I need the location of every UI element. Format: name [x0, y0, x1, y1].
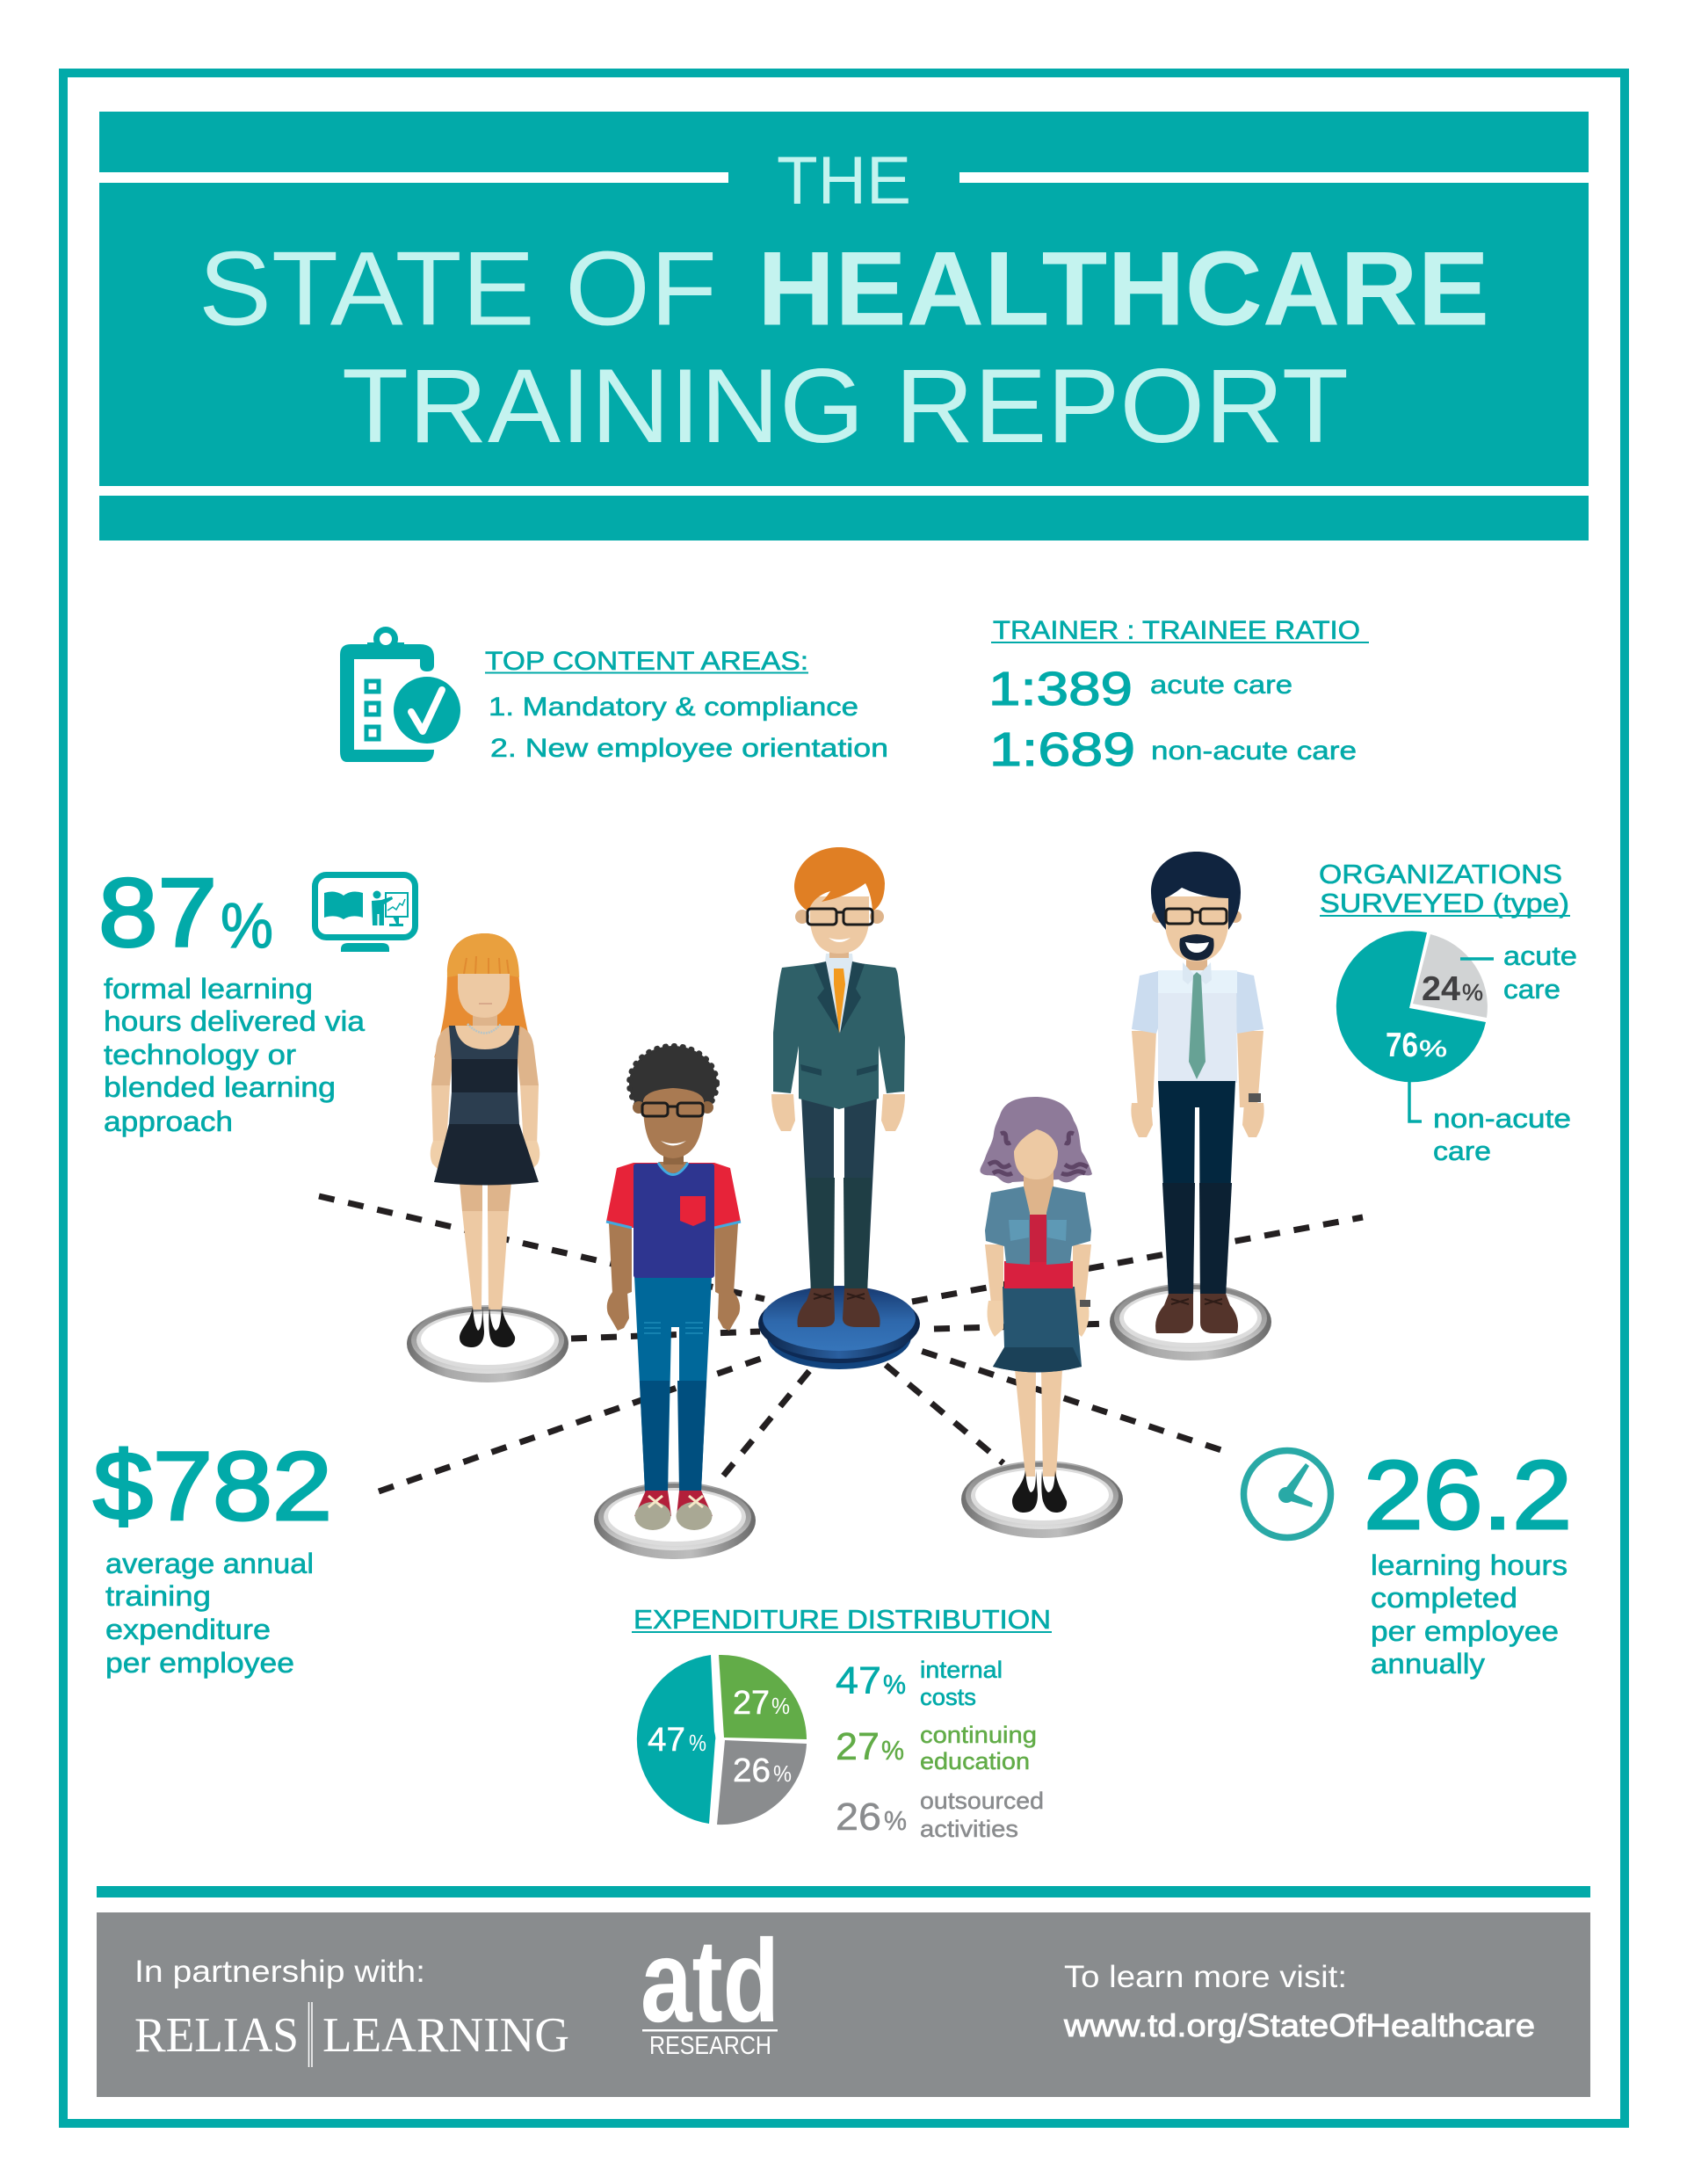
legend: education: [920, 1748, 1030, 1774]
trainer trainee ratio: TRAINER : TRAINEE RATIO: [993, 616, 1360, 645]
footer rule: [97, 1886, 1590, 1897]
stat: 87 percent: 87: [98, 860, 217, 967]
ring platform: woman left: [407, 1305, 568, 1382]
learn more: To learn more visit:: [1064, 1960, 1347, 1994]
pie chart: 26: [733, 1752, 771, 1789]
heading: [1319, 859, 1570, 918]
stat: 26.2 hours: per employee: [1371, 1615, 1559, 1647]
person: woman with orange hair: [431, 933, 539, 1347]
partnership text and Relias logo: RELIAS: [134, 2008, 299, 2063]
person: central man in suit: [771, 847, 905, 1327]
footer panel: [97, 1912, 1590, 2097]
stat: 782 dollars: [93, 1433, 332, 1679]
organizations surveyed pie: %: [1462, 979, 1483, 1005]
header banner: [99, 112, 1589, 541]
ring platform: man left: [594, 1482, 756, 1559]
heading: ORGANIZATIONS: [1319, 859, 1562, 889]
legend: %: [884, 1805, 907, 1836]
title: THE: [777, 142, 911, 218]
stat: 87 percent: %: [221, 891, 273, 961]
stat: 782 dollars: training: [105, 1580, 211, 1612]
stat: 782 dollars: per employee: [105, 1647, 294, 1679]
organizations surveyed pie: non-acute: [1433, 1103, 1571, 1134]
person: man with beard and tie: [1131, 852, 1264, 1333]
organizations surveyed pie: 24: [1422, 970, 1460, 1008]
pie chart: [637, 1655, 807, 1825]
partnership text and Relias logo: [134, 1955, 569, 2067]
trainer trainee ratio: 1:389: [988, 663, 1133, 715]
stat: 782 dollars: average annual: [105, 1548, 314, 1579]
title: HEALTHCARE: [757, 230, 1489, 348]
heading: SURVEYED (type): [1320, 888, 1569, 918]
stat: 87 percent: [98, 860, 365, 1137]
legend: outsourced: [920, 1788, 1044, 1814]
trainer trainee ratio: non-acute care: [1151, 736, 1357, 765]
dashed connector lines: [319, 1196, 1363, 1491]
ATD Research logo: atd: [641, 1916, 779, 2047]
pie chart: %: [771, 1693, 790, 1719]
person: woman with purple hair: [980, 1097, 1092, 1513]
stat: 782 dollars: $782: [93, 1433, 332, 1541]
pie chart: 47: [648, 1722, 685, 1759]
legend: %: [881, 1735, 904, 1766]
ring platform: woman right: [961, 1461, 1123, 1538]
stat: 87 percent: hours delivered via: [104, 1005, 365, 1037]
pie chart: %: [689, 1730, 706, 1756]
expenditure distribution: [632, 1605, 1052, 1842]
icon: monitor with book and presenter: [315, 875, 415, 952]
stat: 26.2 hours: annually: [1371, 1648, 1485, 1680]
legend: 27: [836, 1725, 880, 1768]
trainer trainee ratio: [988, 616, 1369, 776]
learn more: www.td.org/StateOfHealthcare: [1063, 2007, 1535, 2043]
stat: 26.2 hours: 26.2: [1364, 1441, 1572, 1549]
stat: 87 percent: formal learning: [104, 973, 313, 1005]
pie chart: 27: [733, 1685, 770, 1722]
title: [199, 142, 1489, 465]
stat: 26.2 hours: completed: [1371, 1582, 1517, 1614]
top content areas: TOP CONTENT AREAS:: [485, 647, 808, 676]
legend: %: [883, 1669, 906, 1700]
ATD Research logo: RESEARCH: [649, 2032, 771, 2060]
trainer trainee ratio: acute care: [1150, 671, 1292, 700]
legend: [836, 1657, 1044, 1842]
icon: clock: [1244, 1450, 1330, 1538]
trainer trainee ratio: 1:689: [989, 723, 1135, 776]
pie chart: %: [773, 1760, 792, 1787]
legend: internal: [920, 1657, 1003, 1683]
stat: 26.2 hours: [1364, 1441, 1572, 1680]
title: STATE OF: [199, 230, 717, 348]
heading: EXPENDITURE DISTRIBUTION: [634, 1605, 1051, 1635]
partnership text and Relias logo: In partnership with:: [134, 1955, 425, 1989]
partnership text and Relias logo: LEARNING: [322, 2008, 569, 2063]
organizations surveyed pie: acute: [1503, 940, 1577, 971]
ring platform: man right: [1110, 1283, 1271, 1360]
organizations surveyed pie: care: [1433, 1136, 1491, 1166]
top content areas: 1. Mandatory & compliance: [489, 693, 858, 722]
center blue disc: [758, 1286, 920, 1369]
icon: clipboard with check: [340, 627, 460, 762]
legend: 26: [836, 1796, 881, 1839]
stat: 782 dollars: expenditure: [105, 1614, 271, 1645]
organizations surveyed pie: care: [1503, 974, 1560, 1005]
top content areas: 2. New employee orientation: [490, 734, 888, 763]
legend: costs: [920, 1684, 976, 1710]
organizations surveyed pie: %: [1419, 1035, 1447, 1062]
title: TRAINING REPORT: [342, 347, 1349, 465]
stat: 87 percent: blended learning: [104, 1071, 336, 1103]
legend: activities: [920, 1816, 1018, 1842]
top content areas: [485, 647, 888, 763]
stat: 87 percent: approach: [104, 1106, 233, 1137]
organizations surveyed pie: [1319, 859, 1577, 1166]
legend: continuing: [920, 1722, 1037, 1748]
stat: 26.2 hours: learning hours: [1371, 1549, 1568, 1581]
person: man with curly hair: [606, 1046, 741, 1530]
organizations surveyed pie: 76: [1386, 1027, 1418, 1064]
learn more: [1063, 1960, 1535, 2043]
stat: 87 percent: technology or: [104, 1039, 296, 1070]
legend: 47: [836, 1659, 881, 1702]
